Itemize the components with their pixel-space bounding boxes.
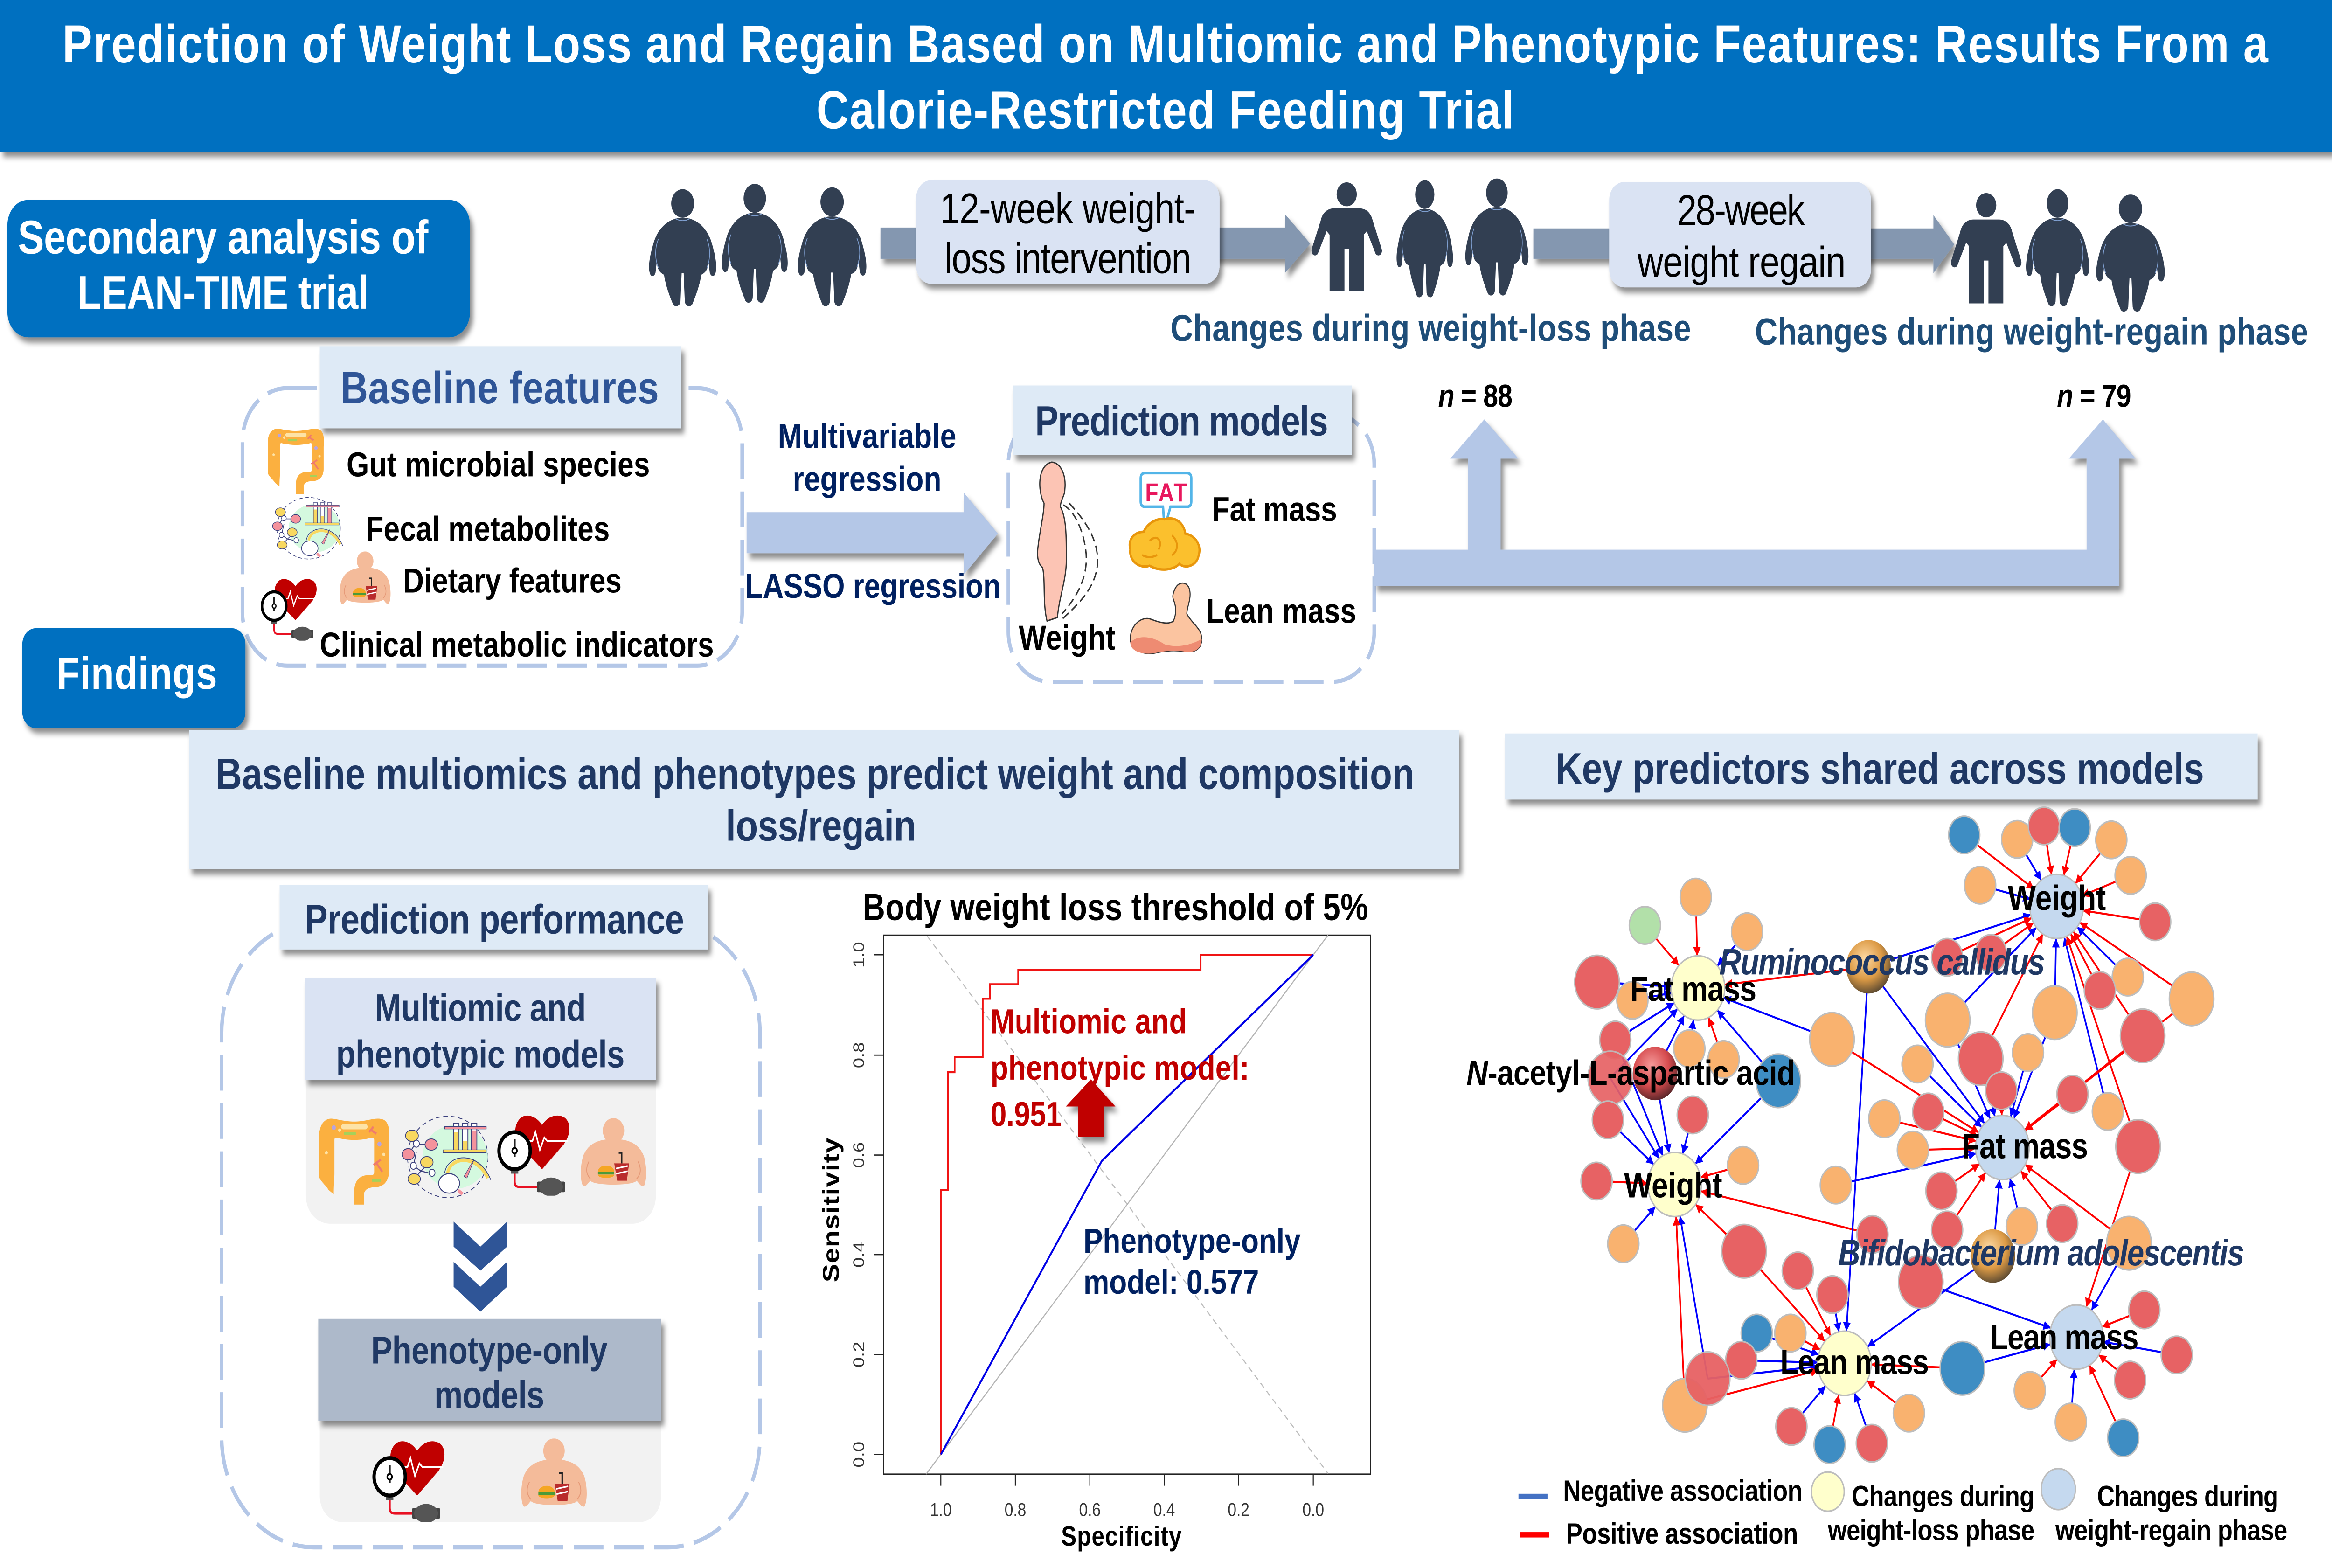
timeline step: 28-week weight regain: weight regain <box>1637 237 1846 286</box>
study timeline <box>649 179 2308 353</box>
arrow: branching to outcomes: n = 79 <box>2057 379 2131 414</box>
callout: multiomic AUC <box>991 1002 1249 1134</box>
axis ticks and tick labels: 0.0 <box>850 1442 868 1468</box>
badge: findings <box>22 628 245 728</box>
icon: gut <box>319 1118 389 1205</box>
axis ticks and tick labels: 0.8 <box>1005 1499 1026 1520</box>
icon: fat speech bubble <box>1130 473 1200 569</box>
chart: ROC curve <box>818 886 1370 1552</box>
callout: multiomic AUC: Multiomic and <box>991 1002 1187 1041</box>
icon: metabolites <box>272 498 343 559</box>
icon: double chevron arrow <box>454 1221 507 1312</box>
label: lean mass: Lean mass <box>1206 591 1356 631</box>
network edges <box>1596 826 2192 1445</box>
panel: prediction performance <box>222 885 760 1547</box>
arrow: into 12-week intervention <box>881 214 1310 273</box>
callout: phenotype-only AUC: Phenotype-only <box>1083 1221 1301 1261</box>
axis ticks and tick labels: 0.4 <box>850 1242 868 1268</box>
hub labels: Weight <box>2008 878 2106 918</box>
legend <box>1519 1469 2287 1550</box>
heading: prediction performance <box>279 885 708 950</box>
timeline step: 12-week weight-loss intervention <box>916 180 1220 284</box>
card: multiomic and phenotypic models: Multiomic and <box>375 986 586 1029</box>
callout: phenotype-only AUC: model: 0.577 <box>1083 1263 1259 1302</box>
axis ticks and tick labels: 0.0 <box>1302 1499 1324 1520</box>
icon group: participants after weight regain <box>1951 189 2165 312</box>
axis ticks and tick labels: 1.0 <box>850 942 868 968</box>
icon: red up arrow <box>1066 1079 1116 1137</box>
label: weight: Weight <box>1019 618 1116 657</box>
timeline step: 12-week weight-loss intervention: 12-week weight- <box>940 184 1196 232</box>
hub labels: Weight <box>1624 1165 1722 1205</box>
axis label: specificity: Specificity <box>1061 1521 1182 1552</box>
icon: body silhouette <box>1038 462 1097 621</box>
callout: multiomic AUC: phenotypic model: <box>991 1048 1249 1087</box>
hub labels: Fat mass <box>1630 969 1756 1009</box>
card: multiomic and phenotypic models: phenotypic models <box>336 1033 625 1076</box>
legend: Changes during <box>2097 1480 2278 1513</box>
hub labels: Fat mass <box>1962 1126 2088 1166</box>
badge: secondary analysis: LEAN-TIME trial <box>77 266 369 319</box>
predictor label: Bifidobacterium adolescentis: Bifidobacterium adolescentis <box>1838 1233 2244 1273</box>
chart title: Body weight loss threshold of 5% <box>862 886 1368 928</box>
feature list <box>320 445 714 664</box>
network nodes <box>1575 807 2214 1464</box>
curve: phenotype-only model <box>941 955 1313 1455</box>
timeline step: 12-week weight-loss intervention: loss intervention <box>944 234 1191 282</box>
timeline step: 28-week weight regain <box>1609 182 1871 287</box>
label: changes during weight-loss phase: Changes during weight-loss phase <box>1171 307 1691 349</box>
icon group: participants after weight loss <box>1312 179 1528 298</box>
axis ticks and tick labels: 0.6 <box>1079 1499 1101 1520</box>
icon: gut <box>268 429 324 494</box>
section heading: main finding: Baseline multiomics and phenotypes predict weight and composition <box>215 750 1415 798</box>
axis ticks and tick labels: 1.0 <box>930 1499 951 1520</box>
legend: Changes during <box>1852 1480 2034 1513</box>
shared predictor spheres <box>1633 940 2015 1283</box>
callout: multiomic AUC: 0.951 <box>991 1095 1062 1134</box>
icon: dietary body <box>521 1438 587 1506</box>
section heading: key predictors: Key predictors shared across models <box>1555 744 2204 793</box>
title banner <box>0 0 2332 152</box>
icon: dietary body <box>340 551 390 604</box>
arrow: regression methods <box>745 416 1001 605</box>
outcome hubs <box>1648 874 2103 1395</box>
icon: dietary body <box>581 1118 646 1186</box>
predictor label: Ruminococcus callidus: Ruminococcus callidus <box>1719 942 2045 983</box>
panel: baseline features <box>243 346 742 666</box>
legend: Positive association <box>1566 1517 1798 1550</box>
axis ticks and tick labels: 0.4 <box>1153 1499 1175 1520</box>
arrow: regression methods: Multivariable <box>778 416 956 456</box>
title banner: Prediction of Weight Loss and Regain Based on Multiomic and Phenotypic Features: Results From a <box>62 14 2269 74</box>
arrow: branching to outcomes <box>1374 379 2136 586</box>
axis ticks and tick labels: 0.8 <box>850 1042 868 1068</box>
badge: findings: Findings <box>56 648 217 699</box>
chart: predictor network <box>1466 807 2244 1464</box>
feature list: Clinical metabolic indicators <box>320 625 714 664</box>
card: multiomic and phenotypic models <box>305 978 656 1224</box>
badge: secondary analysis <box>7 200 470 337</box>
plot frame <box>883 935 1370 1474</box>
icon: blood pressure heart <box>262 579 317 641</box>
section heading: main finding: loss/regain <box>726 802 916 850</box>
arrow: regression methods: regression <box>793 459 941 499</box>
label: changes during weight-regain phase: Changes during weight-regain phase <box>1755 311 2308 353</box>
hub labels: Lean mass <box>1780 1342 1929 1382</box>
callout: phenotype-only AUC <box>1083 1221 1301 1302</box>
feature list: Gut microbial species <box>347 445 650 484</box>
icon: flexed arm <box>1130 583 1202 653</box>
hub labels <box>1624 878 2138 1382</box>
icon: blood pressure heart <box>499 1116 569 1196</box>
legend: Negative association <box>1563 1475 1803 1507</box>
badge: secondary analysis: Secondary analysis of <box>18 211 429 264</box>
legend: weight-regain phase <box>2055 1514 2287 1547</box>
feature list: Fecal metabolites <box>366 509 610 548</box>
legend: weight-loss phase <box>1827 1514 2034 1547</box>
heading: prediction models: Prediction models <box>1035 397 1328 444</box>
axis ticks and tick labels: 0.6 <box>850 1142 868 1168</box>
section heading: main finding <box>189 730 1459 869</box>
curve: multiomic and phenotypic model <box>941 955 1313 1455</box>
panel: prediction models <box>1008 386 1374 682</box>
axis label: sensitivity: Sensitivity <box>818 1138 844 1282</box>
timeline step: 28-week weight regain: 28-week <box>1677 186 1805 234</box>
arrow: branching to outcomes: n = 88 <box>1438 379 1513 414</box>
icon: blood pressure heart <box>374 1441 444 1523</box>
card: phenotype-only models <box>318 1319 661 1523</box>
icon: fat speech bubble: FAT <box>1145 478 1187 507</box>
hub labels: Lean mass <box>1990 1317 2138 1357</box>
axis ticks and tick labels: 0.2 <box>850 1341 868 1367</box>
arrow: into 28-week regain <box>1534 215 1954 273</box>
title banner: Calorie-Restricted Feeding Trial <box>817 80 1514 140</box>
icon group: baseline participants <box>649 184 867 306</box>
section heading: key predictors <box>1505 734 2258 799</box>
heading: prediction models <box>1013 386 1352 455</box>
predictor label: N-acetyl-L-aspartic acid: N-acetyl-L-aspartic acid <box>1466 1053 1795 1093</box>
heading: baseline features: Baseline features <box>340 363 659 414</box>
feature list: Dietary features <box>403 561 622 600</box>
label: fat mass: Fat mass <box>1212 490 1337 529</box>
card: phenotype-only models: models <box>434 1374 544 1417</box>
heading: prediction performance: Prediction performance <box>305 897 684 943</box>
card: phenotype-only models: Phenotype-only <box>371 1329 608 1372</box>
heading: baseline features <box>320 346 681 428</box>
arrow: regression methods: LASSO regression <box>745 567 1001 605</box>
icon: metabolites <box>402 1116 491 1198</box>
axis ticks and tick labels: 0.2 <box>1228 1499 1249 1520</box>
reference diagonals <box>926 935 1328 1474</box>
axis ticks and tick labels <box>850 942 1324 1520</box>
